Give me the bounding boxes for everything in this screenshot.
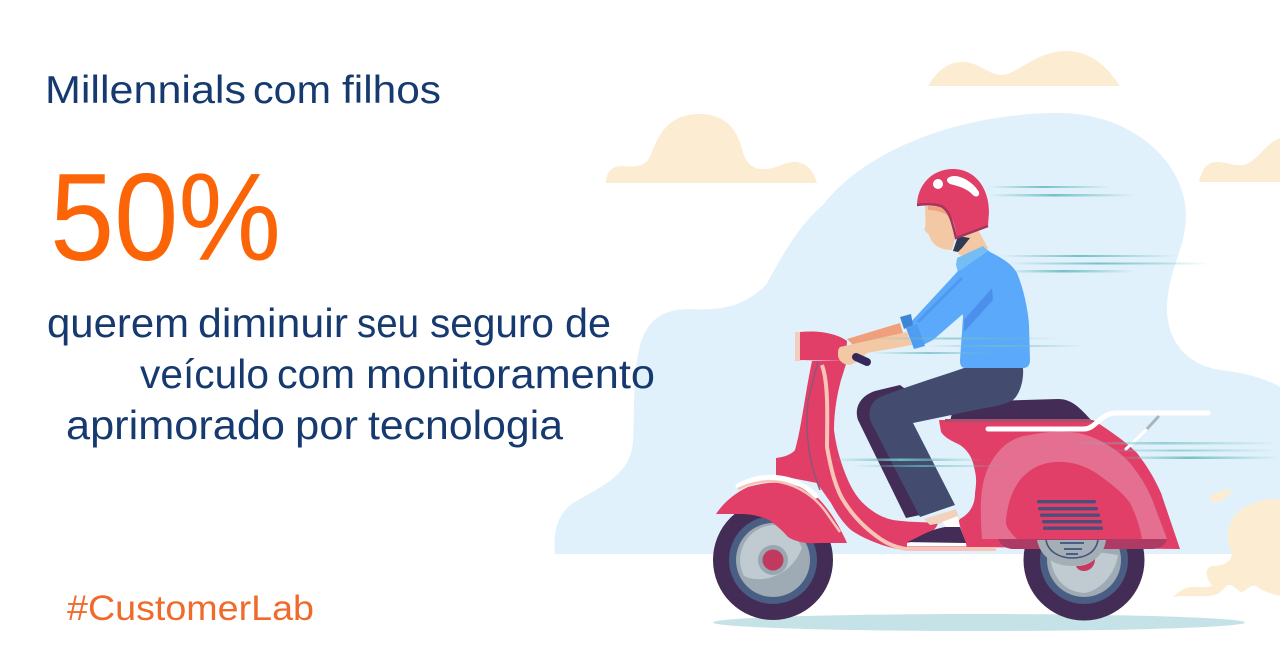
heading: com <box>253 69 331 112</box>
description line 3: tecnologia <box>368 402 563 448</box>
clouds <box>606 51 1280 597</box>
description line 2 <box>140 351 655 397</box>
face <box>924 206 955 250</box>
cloud wisp <box>1210 490 1232 503</box>
body lower band <box>998 539 1167 549</box>
shoe <box>907 509 966 546</box>
description line 1: querem <box>47 300 189 346</box>
body vents <box>1037 500 1103 530</box>
front leg of rider <box>869 368 1023 517</box>
rear arm <box>847 323 903 347</box>
handle grip <box>856 357 867 362</box>
cloud: left <box>606 114 817 183</box>
description text <box>47 300 655 448</box>
seat <box>950 399 1092 421</box>
leg shield trim <box>807 362 996 549</box>
big statistic: 50% <box>50 149 281 287</box>
background blob <box>554 113 1280 554</box>
rear wheel <box>1024 500 1144 620</box>
rear leg of rider <box>857 385 925 518</box>
speed lines <box>831 186 1280 467</box>
rear rack <box>988 413 1208 449</box>
cloud: top <box>928 51 1120 86</box>
body arch highlight <box>981 432 1167 539</box>
description line 3: por <box>295 402 358 448</box>
hub cover <box>1037 540 1106 571</box>
rear body <box>939 420 1180 549</box>
description line 3 <box>66 402 563 448</box>
helmet <box>917 169 989 238</box>
heading: Millennials <box>45 69 246 112</box>
description line 2: monitoramento <box>366 351 655 397</box>
cloud: right <box>1199 138 1280 182</box>
description line 1: de <box>565 300 611 346</box>
shirt collar <box>956 246 988 272</box>
front wheel <box>713 500 833 620</box>
helmet strap <box>953 236 970 252</box>
shirt torso <box>957 248 1030 368</box>
description line 1: diminuir <box>198 300 348 346</box>
handlebar head <box>795 331 847 361</box>
scooter and rider illustration <box>713 169 1280 620</box>
description line 1: seguro <box>430 300 554 346</box>
ground shadow <box>713 614 1245 631</box>
description line 1: seu <box>357 300 419 346</box>
hashtag: #CustomerLab <box>67 589 314 628</box>
description line 1 <box>47 300 611 346</box>
neck <box>958 228 988 260</box>
front leg shield <box>776 361 996 549</box>
cloud: lower right puff <box>1173 499 1280 597</box>
description line 2: com <box>277 351 355 397</box>
front arm and hand <box>838 332 912 365</box>
shirt sleeve <box>900 267 993 349</box>
description line 3: aprimorado <box>66 402 285 448</box>
description line 2: veículo <box>140 351 269 397</box>
seat underside line <box>945 419 1094 422</box>
body arch inner panel <box>1006 462 1142 539</box>
front fender <box>716 477 847 543</box>
heading <box>45 69 441 112</box>
heading: filhos <box>342 69 441 112</box>
